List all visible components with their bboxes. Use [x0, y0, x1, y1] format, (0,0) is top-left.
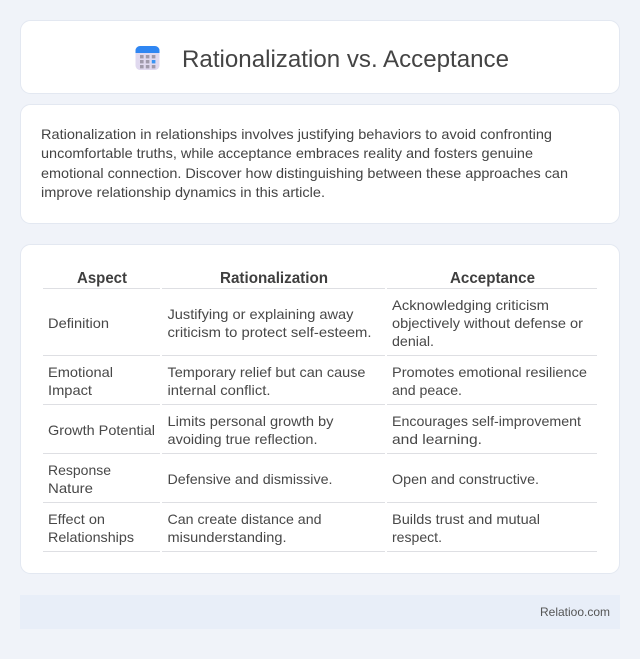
row: definition: denial. [392, 333, 434, 349]
intro text: emotional connection. Discover how distinguishing between these approaches can [41, 165, 568, 181]
row: response nature [48, 462, 539, 496]
table header: Acceptance [450, 270, 535, 287]
title: Rationalization vs. Acceptance [182, 46, 509, 73]
row: response nature: Nature [48, 480, 93, 496]
intro text: improve relationship dynamics in this article. [41, 184, 325, 200]
row: effect on relationships: misunderstanding. [168, 529, 286, 545]
table header: Aspect [77, 270, 128, 287]
row: effect on relationships: Effect on [48, 511, 105, 527]
row: emotional impact: internal conflict. [168, 382, 270, 398]
intro text [41, 126, 568, 200]
row: emotional impact [48, 364, 587, 398]
row: definition: Justifying or explaining away [168, 306, 354, 322]
table header: Rationalization [220, 270, 328, 287]
row: effect on relationships: Can create distance and [168, 511, 322, 527]
row: growth potential: and learning. [392, 431, 482, 447]
row: definition: objectively without defense or [392, 315, 583, 331]
row: response nature: Open and constructive. [392, 471, 539, 487]
table header [77, 270, 535, 287]
row: emotional impact: Temporary relief but can cause [168, 364, 366, 380]
row: emotional impact: Impact [48, 382, 92, 398]
footer: Relatioo.com [540, 605, 610, 619]
row: growth potential: Encourages self-improvement [392, 413, 581, 429]
row: growth potential [48, 413, 581, 447]
row: response nature: Response [48, 462, 111, 478]
row: effect on relationships: Builds trust and mutual [392, 511, 540, 527]
row: emotional impact: Emotional [48, 364, 113, 380]
row: definition: Definition [48, 315, 109, 331]
panel: title card [20, 20, 620, 94]
row: definition: criticism to protect self-esteem. [168, 324, 372, 340]
panel: comparison table [20, 244, 620, 574]
row: response nature: Defensive and dismissive. [168, 471, 332, 487]
intro text: uncomfortable truths, while acceptance embraces reality and fosters genuine [41, 145, 533, 161]
row: effect on relationships: Relationships [48, 529, 134, 545]
row: definition: Acknowledging criticism [392, 297, 549, 313]
icon: calendar [136, 46, 160, 70]
row: emotional impact: Promotes emotional resilience [392, 364, 587, 380]
row: definition [48, 297, 583, 349]
panel: introduction [20, 104, 620, 224]
row: growth potential: Limits personal growth by [168, 413, 334, 429]
row: growth potential: Growth Potential [48, 422, 155, 438]
row: effect on relationships: respect. [392, 529, 442, 545]
row: growth potential: avoiding true reflection. [168, 431, 318, 447]
footer [20, 595, 620, 629]
row: effect on relationships [48, 511, 540, 545]
row: emotional impact: and peace. [392, 382, 462, 398]
intro text: Rationalization in relationships involves justifying behaviors to avoid confronting [41, 126, 552, 142]
